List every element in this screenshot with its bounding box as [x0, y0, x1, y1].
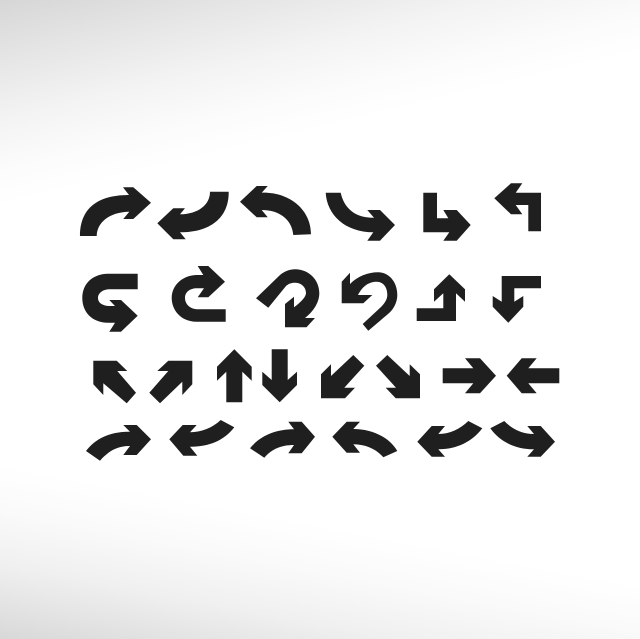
- icon: shallow curve left: [169, 420, 234, 456]
- icon: shallow curve left rising: [417, 421, 482, 457]
- row 4: shallow curved arrows: [86, 420, 555, 461]
- icon: U-turn arrow diagonal down: [256, 269, 319, 327]
- icon: curved arrow up-left: [240, 186, 311, 235]
- icon: step arrow up: [417, 274, 465, 321]
- icon: arrow up-right: [149, 361, 192, 403]
- icon: curved arrow up-right: [80, 187, 151, 236]
- icon: curved arrow down-left: [157, 192, 229, 239]
- icon: shallow curve right raised: [250, 422, 315, 458]
- icon: angled arrow right: [423, 193, 471, 241]
- row 3: straight arrows: [93, 349, 559, 403]
- icon: shallow curve left falling: [332, 422, 397, 457]
- row 1: bent arrows: [80, 183, 541, 241]
- icon: shallow curve right: [86, 425, 151, 461]
- icon: arrow down-right: [376, 355, 420, 398]
- icon: U-turn arrow diagonal left: [342, 272, 397, 331]
- icon: arrow up: [217, 349, 252, 402]
- icon: step arrow down: [493, 276, 541, 323]
- icon: curved arrow down-right: [326, 193, 395, 241]
- icon: U-turn arrow up right: [172, 266, 226, 322]
- icon: shallow curve right falling: [490, 421, 555, 457]
- icon: arrow down: [262, 349, 297, 402]
- icon: arrow up-left: [93, 361, 136, 403]
- icon: arrow down-left: [321, 355, 364, 398]
- icon: angled arrow left: [494, 183, 541, 231]
- row 2: U-turn arrows: [82, 266, 541, 332]
- icon: U-turn arrow left to right: [82, 274, 138, 332]
- icon: arrow left: [507, 358, 559, 393]
- icon: arrow right: [443, 358, 496, 393]
